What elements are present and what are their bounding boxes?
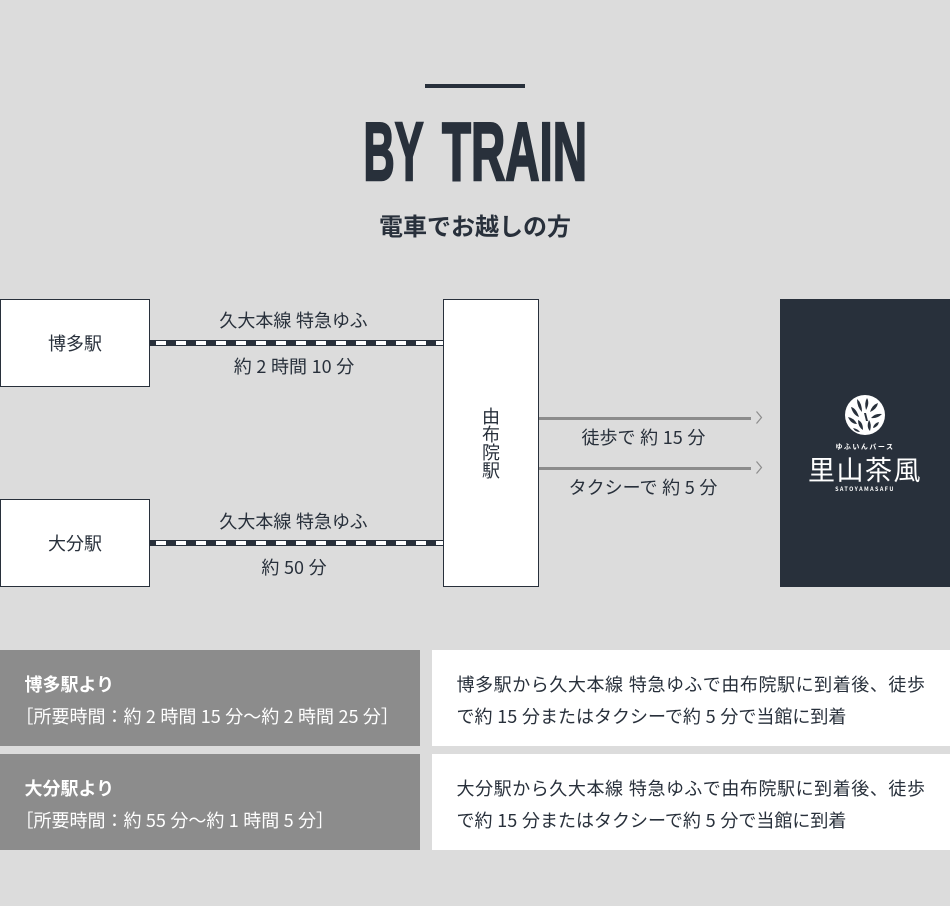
walking time label: 徒歩で 約 15 分 xyxy=(582,424,705,450)
title rule xyxy=(425,84,525,88)
logo romaji: SATOYAMASAFU xyxy=(835,485,895,493)
route time: Oita: 約 50 分 xyxy=(261,554,327,580)
station: Oita xyxy=(0,499,150,587)
station: Hakata: 博多駅 xyxy=(48,330,102,356)
station: Yufuin xyxy=(443,299,539,587)
route time: Hakata: 約 2 時間 10 分 xyxy=(234,353,354,379)
rail line: Hakata to Yufuin xyxy=(150,340,443,346)
info text: from Oita: 大分駅から久大本線 特急ゆふで由布院駅に到着後、徒歩で約 15 分またはタクシーで約 5 分で当館に到着 xyxy=(456,775,925,833)
info label: from Hakata xyxy=(0,650,420,746)
station: Oita: 大分駅 xyxy=(48,530,102,556)
panel: hotel logo xyxy=(780,299,950,587)
arrow: taxi xyxy=(756,461,762,474)
arrow: walking xyxy=(756,411,762,424)
station: Hakata xyxy=(0,299,150,387)
station: Yufuin: 院 xyxy=(482,439,500,465)
logo name: 里山茶風 xyxy=(808,449,922,488)
subtitle: 電車でお越しの方 xyxy=(379,207,571,242)
info text: from Hakata xyxy=(432,650,950,746)
taxi time label: タクシーで 約 5 分 xyxy=(569,474,717,500)
info text: from Hakata: 博多駅から久大本線 特急ゆふで由布院駅に到着後、徒歩で約 15 分またはタクシーで約 5 分で当館に到着 xyxy=(456,671,925,729)
info label: from Hakata: ［所要時間：約 2 時間 15 分～約 2 時間 25 分］ xyxy=(16,703,399,729)
info label: from Hakata: 博多駅より xyxy=(24,671,114,697)
station: Yufuin: 駅 xyxy=(482,457,500,483)
info label: from Oita xyxy=(0,754,420,850)
info label: from Oita: ［所要時間：約 55 分～約 1 時間 5 分］ xyxy=(16,807,334,833)
logo small kana: ゆふいんバース xyxy=(835,442,894,452)
info text: from Oita xyxy=(432,754,950,850)
icon: bamboo emblem xyxy=(845,395,885,435)
taxi route line xyxy=(539,466,751,470)
route label: Hakata line: 久大本線 特急ゆふ xyxy=(219,307,368,333)
info label: from Oita: 大分駅より xyxy=(24,775,114,801)
station: Yufuin: 由 xyxy=(482,403,500,429)
title: BY TRAIN xyxy=(364,110,587,190)
route label: Oita line: 久大本線 特急ゆふ xyxy=(219,508,368,534)
rail line: Oita to Yufuin xyxy=(150,540,443,546)
station: Yufuin: 布 xyxy=(482,421,500,447)
walking route line xyxy=(539,416,751,420)
